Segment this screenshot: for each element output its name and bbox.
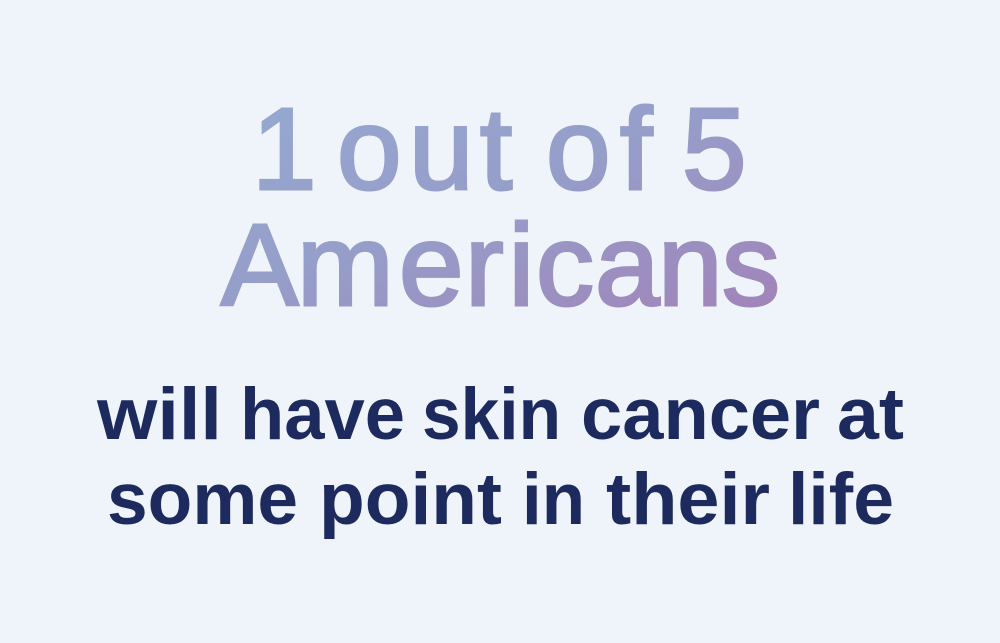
supporting statement: their: [606, 459, 770, 540]
supporting statement: skin: [422, 374, 561, 455]
headline statistic: 1 out of 5: [252, 84, 747, 214]
supporting statement: point: [319, 459, 502, 540]
supporting statement: some: [107, 459, 298, 540]
supporting statement: will: [96, 374, 222, 455]
supporting statement: life: [788, 459, 894, 540]
supporting statement: have: [240, 374, 405, 455]
headline statistic: Americans: [221, 200, 780, 330]
supporting statement: in: [522, 459, 585, 540]
supporting statement: at: [837, 374, 904, 455]
supporting statement: [96, 374, 904, 540]
supporting statement: cancer: [581, 374, 820, 455]
headline statistic: [221, 84, 780, 330]
